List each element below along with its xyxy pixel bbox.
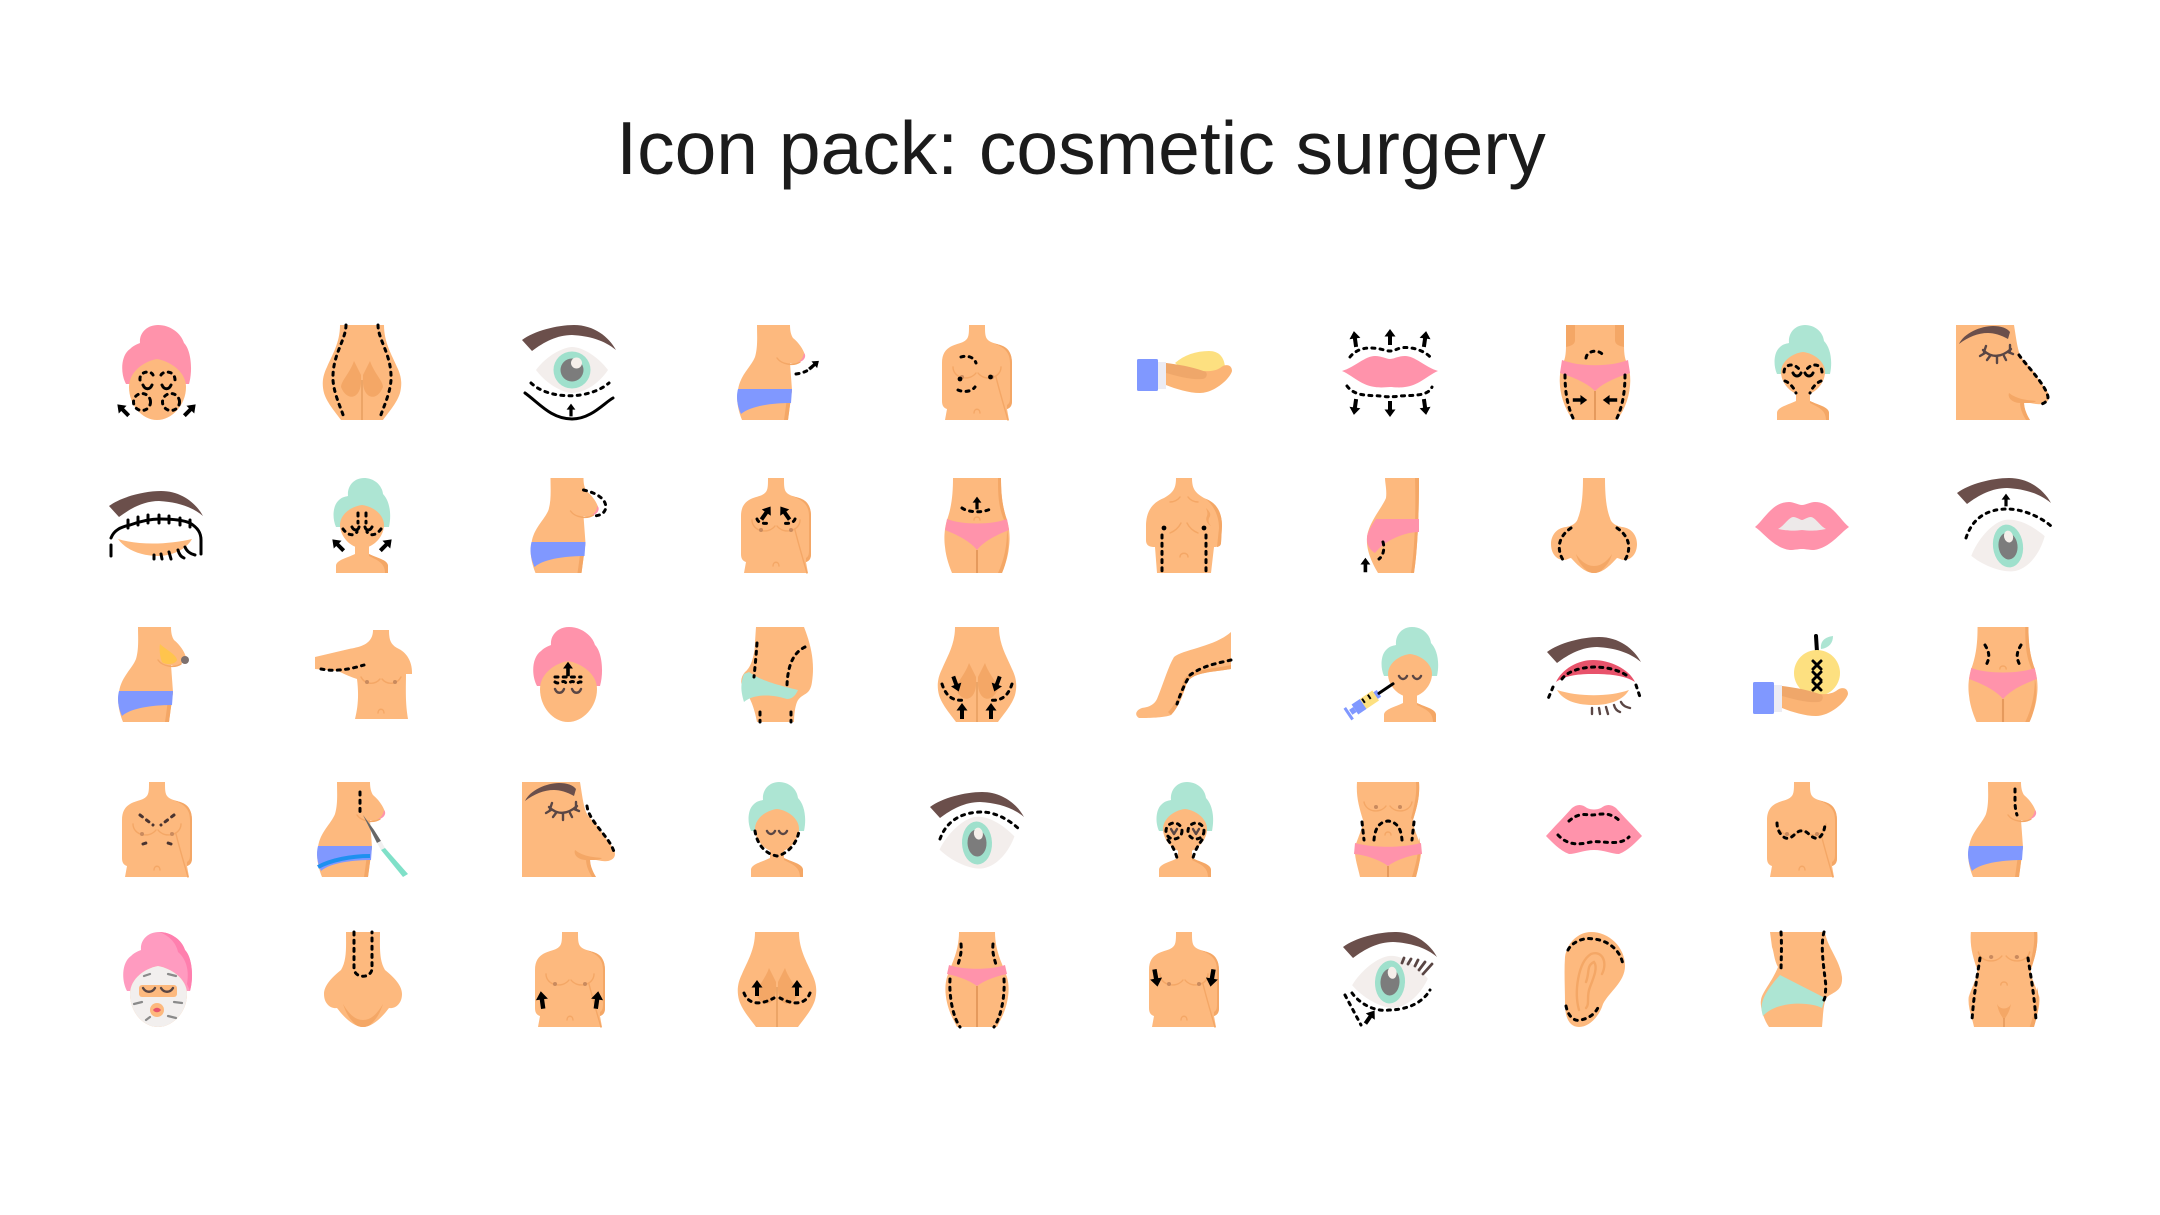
icon: teal towel head cheeks <box>1775 325 1831 420</box>
icon: eye upper dashes <box>930 792 1024 875</box>
icon: head with face mask <box>123 932 192 1027</box>
icon: side belly teal briefs <box>1761 932 1842 1027</box>
icon: hips rear dashed <box>323 325 401 420</box>
icon: torso with brown markings <box>122 782 192 877</box>
icon: hips rear arrows up <box>738 932 816 1027</box>
icon: teal head with syringe <box>1344 627 1438 722</box>
icon: torso breast reduction <box>942 325 1012 420</box>
icon: lips with arrows <box>1342 329 1438 417</box>
icon: torso arm raised <box>315 630 412 719</box>
icon: teal towel head lift with arrows <box>328 478 396 573</box>
icon: ear <box>1565 932 1625 1027</box>
icon: stitched eyelid <box>109 491 203 559</box>
icon: side body breast contour <box>530 478 606 573</box>
icon: leg <box>1136 632 1231 718</box>
icon: belly with pink briefs <box>944 478 1010 573</box>
icon: lips dashed <box>1546 805 1642 854</box>
icon: side body with implant <box>118 627 189 722</box>
title: Icon pack: cosmetic surgery <box>616 106 1546 190</box>
icon: torso with side arrows down <box>1149 932 1219 1027</box>
icon: pink towel head forehead <box>533 627 602 722</box>
icon: side hip teal briefs <box>741 627 813 722</box>
icon: hand holding implant <box>1137 351 1232 393</box>
icon: torso breast lift arrows <box>741 478 811 573</box>
icon: abdomen with pink briefs <box>1354 782 1422 877</box>
icon: male torso with dashed lines <box>1146 478 1222 573</box>
icon: eye under-lid <box>522 325 616 419</box>
icon: full torso side dashes <box>1969 932 2039 1027</box>
icon: side hip pink <box>1360 478 1419 573</box>
icon: eye brow lift <box>1957 478 2051 581</box>
icon: thighs with pink briefs <box>1560 325 1630 420</box>
icon: hips with pink briefs dashes <box>1968 627 2038 722</box>
icon: face lift, pink towel <box>113 325 200 420</box>
icon: side body with vertical dash <box>1968 782 2036 877</box>
icon: teal head with eye circles <box>1157 782 1213 877</box>
icon: side body with scalpel <box>317 782 408 877</box>
icon: eye with lashes and lower lift <box>1343 932 1437 1027</box>
icon: profile nose <box>1956 325 2049 420</box>
icon: eye with red lid <box>1547 637 1641 714</box>
icon: torso with side arrows up <box>535 932 605 1027</box>
icon: teal head with chin line <box>749 782 805 877</box>
icon: profile nose dashes <box>522 782 615 877</box>
icon: hand holding apple <box>1753 636 1848 716</box>
icon: nose bridge dashed <box>324 932 402 1027</box>
icon: nose wings <box>1551 478 1637 573</box>
icon: pink lips <box>1755 502 1849 550</box>
icon: side body breast lift <box>737 325 822 420</box>
icon: hips rear arrows <box>938 627 1016 722</box>
icon: torso under-breast dashes <box>1767 782 1837 877</box>
icon: slim waist pink briefs <box>945 932 1009 1027</box>
